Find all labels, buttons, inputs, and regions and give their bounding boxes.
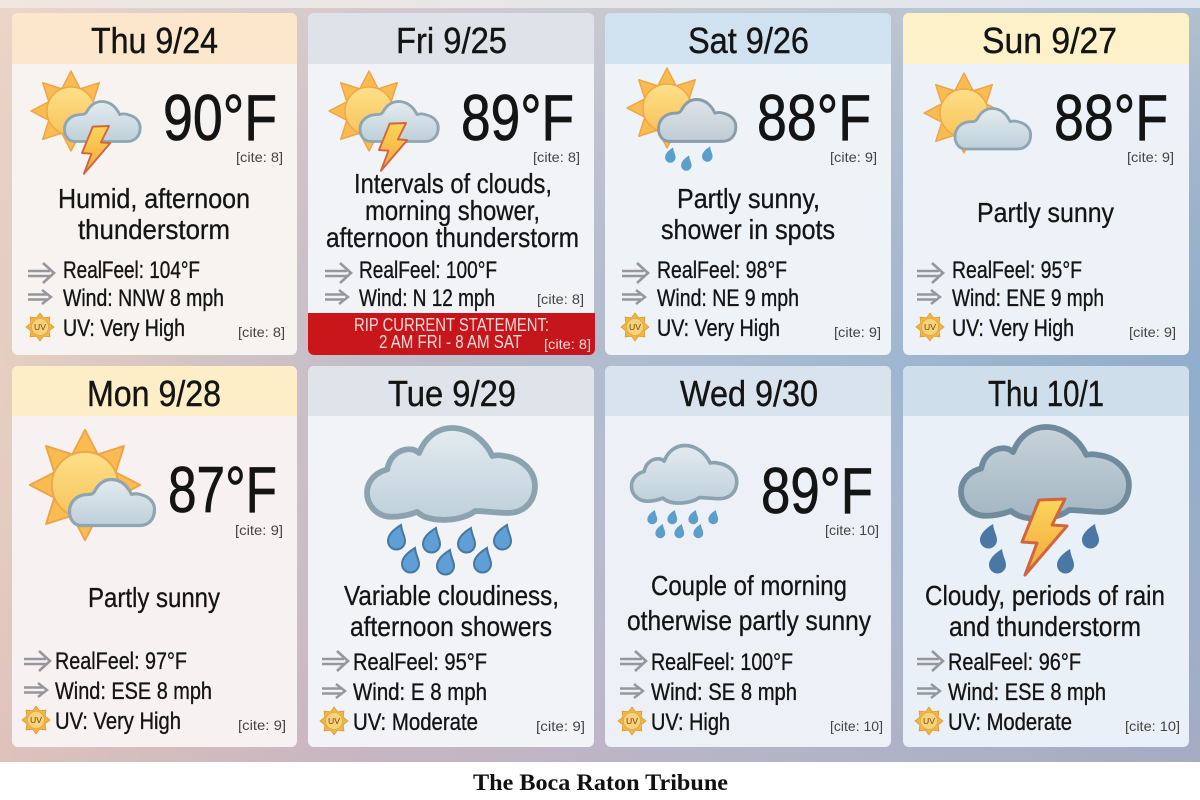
details: Wind: ENE 9 mph	[952, 285, 1104, 312]
description: Humid, afternoon	[58, 183, 250, 214]
alert: rip current statement	[308, 313, 595, 355]
details: UV	[923, 717, 936, 726]
details: Wind: NE 9 mph	[657, 285, 799, 312]
details: RealFeel: 98°F	[657, 257, 787, 284]
header: Thu 9/24	[12, 13, 297, 64]
panel: Thu 10/1	[903, 366, 1189, 747]
details: Wind: ESE 8 mph	[948, 679, 1106, 706]
details: UV: Moderate	[948, 709, 1072, 736]
details: Wind: NNW 8 mph	[63, 285, 224, 312]
details	[22, 648, 212, 735]
description	[344, 580, 559, 642]
details: UV	[328, 717, 341, 726]
header: Fri 9/25: Fri 9/25	[396, 20, 507, 61]
details: UV	[30, 716, 43, 725]
details	[915, 649, 1106, 736]
citation: [cite: 9]	[536, 718, 585, 734]
panel: Fri 9/25	[308, 13, 595, 355]
details	[325, 257, 497, 312]
details	[26, 257, 224, 342]
header: Thu 9/24: Thu 9/24	[91, 20, 218, 61]
details: UV	[629, 323, 642, 332]
details: UV	[626, 717, 639, 726]
citation: [cite: 8]	[537, 291, 584, 307]
details: UV: Very High	[63, 315, 185, 342]
details	[618, 649, 797, 736]
panel: Thu 9/24	[12, 13, 297, 355]
details: RealFeel: 100°F	[651, 649, 793, 676]
details: Wind: N 12 mph	[359, 285, 495, 312]
details: RealFeel: 97°F	[55, 648, 187, 675]
details: RealFeel: 100°F	[359, 257, 497, 284]
temperature: 90°F	[163, 81, 277, 154]
description: and thunderstorm	[949, 611, 1141, 642]
icon: sun and cloud	[924, 73, 1031, 153]
details: UV: Very High	[657, 315, 780, 342]
description	[58, 183, 250, 245]
alert: rip current statement: 2 AM FRI - 8 AM SAT	[379, 332, 522, 352]
description: thunderstorm	[78, 214, 230, 245]
icon: sun, cloud and rain	[627, 68, 736, 171]
details: RealFeel: 104°F	[63, 257, 200, 284]
temperature: 89°F	[761, 454, 873, 527]
description: morning shower,	[365, 195, 540, 226]
panel: Wed 9/30	[605, 366, 891, 747]
citation: [cite: 10]	[1125, 718, 1180, 734]
details: UV: High	[651, 709, 730, 736]
temperature: 87°F	[168, 453, 277, 526]
header: Sun 9/27: Sun 9/27	[982, 20, 1117, 61]
description: Partly sunny	[88, 582, 220, 613]
citation: [cite: 10]	[825, 522, 879, 538]
temperature: 88°F	[1054, 81, 1168, 154]
header: Tue 9/29	[308, 366, 594, 416]
details: UV: Moderate	[353, 709, 478, 736]
citation: [cite: 8]	[238, 324, 285, 340]
details: UV: Very High	[55, 708, 181, 735]
description: otherwise partly sunny	[627, 605, 871, 636]
citation: [cite: 9]	[830, 149, 877, 165]
description: Variable cloudiness,	[344, 580, 559, 611]
description	[326, 168, 579, 253]
header: Sat 9/26: Sat 9/26	[688, 20, 809, 61]
icon: cloud with rain	[632, 446, 737, 538]
description	[925, 580, 1165, 642]
header: Sat 9/26	[605, 13, 891, 64]
alert: rip current statement: RIP CURRENT STATEMENT:	[354, 315, 549, 335]
header: Tue 9/29: Tue 9/29	[388, 373, 516, 414]
details: Wind: ESE 8 mph	[55, 678, 212, 705]
header: Mon 9/28	[12, 366, 297, 416]
description: shower in spots	[661, 214, 835, 245]
citation: [cite: 8]	[236, 149, 283, 165]
description: afternoon thunderstorm	[326, 222, 579, 253]
citation: [cite: 9]	[1129, 324, 1176, 340]
details: UV: Very High	[952, 315, 1074, 342]
details: Wind: E 8 mph	[353, 679, 487, 706]
footer: publication name: The Boca Raton Tribune	[473, 770, 728, 795]
icon: rain cloud	[367, 428, 535, 574]
details	[621, 257, 799, 342]
header: Thu 10/1: Thu 10/1	[988, 373, 1104, 414]
header: Sun 9/27	[903, 13, 1189, 64]
citation: [cite: 10]	[830, 718, 883, 734]
citation: [cite: 9]	[1127, 149, 1174, 165]
details	[916, 257, 1104, 342]
alert: rip current statement: [cite: 8]	[544, 336, 591, 352]
icon: storm cloud	[961, 427, 1129, 575]
citation: [cite: 8]	[533, 149, 580, 165]
panel: Tue 9/29	[308, 366, 594, 747]
footer: publication name	[0, 762, 1200, 800]
header: Thu 10/1	[903, 366, 1189, 416]
icon: sun and cloud	[30, 430, 154, 540]
description: Partly sunny,	[677, 183, 820, 214]
panel: Sun 9/27	[903, 13, 1189, 355]
details: Wind: SE 8 mph	[651, 679, 797, 706]
header: Fri 9/25	[308, 13, 594, 64]
temperature: 89°F	[461, 81, 574, 154]
description: afternoon showers	[350, 611, 552, 642]
icon: sun, cloud and lightning	[329, 71, 438, 171]
header: Mon 9/28: Mon 9/28	[87, 373, 221, 414]
citation: [cite: 9]	[238, 717, 286, 733]
icon: sun, cloud and lightning	[31, 71, 140, 174]
details: UV	[924, 323, 937, 332]
temperature: 88°F	[757, 81, 871, 154]
description: Partly sunny	[977, 197, 1114, 228]
description: Cloudy, periods of rain	[925, 580, 1165, 611]
panel: Sat 9/26	[605, 13, 891, 355]
citation: [cite: 9]	[834, 324, 881, 340]
panel: Mon 9/28	[12, 366, 297, 747]
description	[661, 183, 835, 245]
details: RealFeel: 96°F	[948, 649, 1081, 676]
details	[320, 649, 487, 736]
citation: [cite: 9]	[235, 522, 283, 538]
description: Intervals of clouds,	[354, 168, 552, 199]
description	[627, 570, 871, 636]
details: UV	[34, 323, 47, 332]
description: Couple of morning	[651, 570, 847, 601]
details: RealFeel: 95°F	[353, 649, 487, 676]
header: Wed 9/30: Wed 9/30	[680, 373, 818, 414]
header: Wed 9/30	[605, 366, 891, 416]
details: RealFeel: 95°F	[952, 257, 1082, 284]
